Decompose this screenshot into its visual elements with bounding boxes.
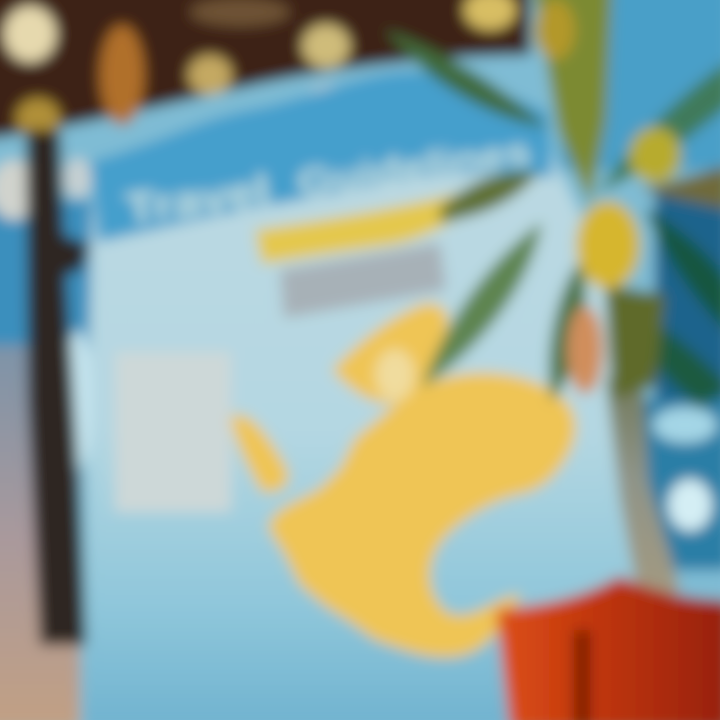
grey text block <box>280 243 446 318</box>
heading <box>122 129 534 234</box>
trunk <box>606 350 680 605</box>
heading: Travel <box>122 166 273 234</box>
yellow banner <box>255 190 478 264</box>
yellow map <box>230 303 576 658</box>
heading: Guidelines <box>295 131 534 205</box>
left lights <box>0 158 92 220</box>
palm tree <box>385 0 720 605</box>
fronds <box>385 0 720 408</box>
panel: poster <box>64 72 640 720</box>
left text block <box>115 352 231 512</box>
ceiling with lights <box>0 0 530 140</box>
poster header band <box>90 72 552 242</box>
left pole <box>26 130 90 645</box>
red pot <box>496 576 720 720</box>
